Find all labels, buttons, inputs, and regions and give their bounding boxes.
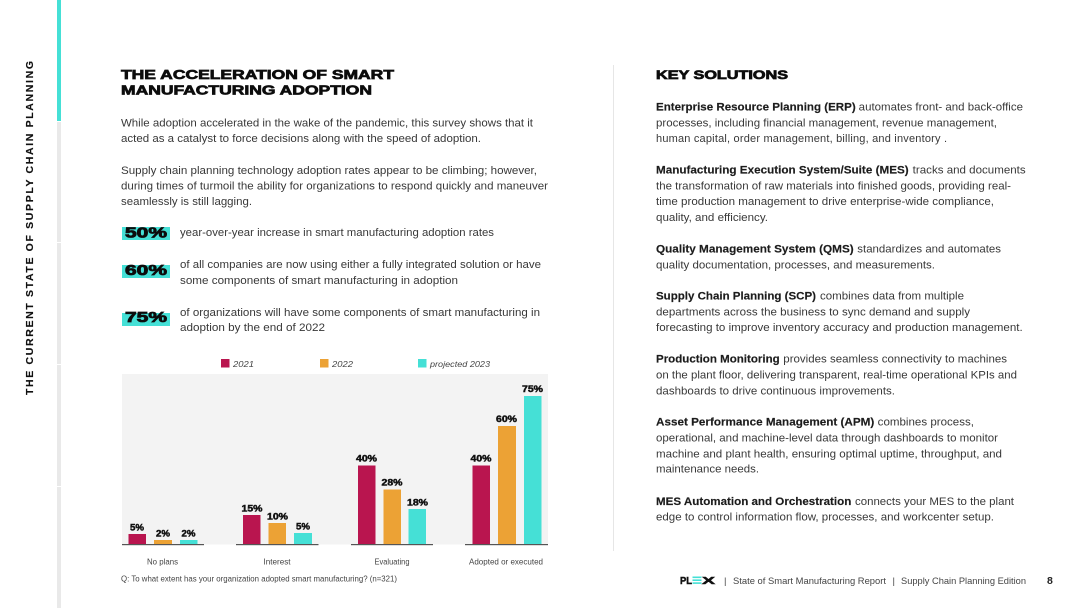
solution: APM: machine and plant health, ensuring optimal uptime, throughput, and — [656, 448, 1002, 460]
stat: 75%: adoption by the end of 2022 — [180, 322, 325, 334]
column divider — [613, 65, 614, 551]
intro text block — [121, 118, 548, 208]
chart legend: projected 2023 — [429, 359, 490, 369]
group: no plans — [128, 522, 198, 544]
intro text block: during times of turmoil the ability for organizations to respond quickly and maneuver — [121, 180, 548, 192]
solution: MES automation and orchestration: MES Automation and Orchestration — [656, 496, 852, 508]
solution: production monitoring: on the plant floor, delivering transparent, real-time operational KPIs and — [656, 369, 1017, 381]
stat: 50% — [122, 224, 495, 242]
solution: ERP — [656, 102, 1023, 145]
stat: 50%: year-over-year increase in smart manufacturing adoption rates — [180, 227, 495, 239]
group: evaluating: 40% — [356, 454, 377, 464]
intro text block: acted as a catalyst to force decisions along with the speed of adoption. — [121, 133, 481, 145]
solution: QMS: Quality Management System (QMS) — [656, 243, 854, 255]
bar chart — [122, 374, 548, 566]
intro text block: While adoption accelerated in the wake of the pandemic, this survey shows that it — [121, 118, 533, 130]
axis category labels: Interest — [264, 558, 291, 566]
group: no plans: 5% — [130, 522, 144, 532]
solution: SCP: forecasting to improve inventory accuracy and production management. — [656, 322, 1023, 334]
stat: 60%: some components of smart manufacturing in adoption — [180, 275, 458, 287]
chart legend — [221, 359, 490, 369]
solution: QMS — [656, 243, 1002, 271]
vertical section label: THE CURRENT STATE OF SUPPLY CHAIN PLANNING — [24, 61, 36, 395]
solution: ERP: automates front- and back-office — [859, 102, 1023, 114]
group: interest — [242, 504, 312, 544]
solution: SCP: combines data from multiple — [820, 291, 964, 303]
footer — [680, 575, 1053, 587]
group: adopted or executed: 75% — [522, 384, 543, 394]
group: adopted or executed: 60% — [496, 414, 517, 424]
solution: ERP: Enterprise Resource Planning (ERP) — [656, 102, 856, 114]
solution: production monitoring: dashboards to drive continuous improvements. — [656, 385, 895, 397]
heading: acceleration of smart manufacturing adoption: MANUFACTURING ADOPTION — [121, 82, 372, 97]
solution: MES automation and orchestration — [656, 496, 1014, 523]
group: interest: 5% — [296, 522, 310, 532]
solution: QMS: quality documentation, processes, and measurements. — [656, 259, 935, 271]
stat: 75% — [122, 307, 540, 334]
solution: MES: the transformation of raw materials into finished goods, providing real- — [656, 180, 1011, 192]
group: interest: 15% — [242, 504, 262, 514]
side progress rail — [57, 0, 61, 608]
solution: MES: tracks and documents — [913, 165, 1026, 177]
solution: MES automation and orchestration: edge to control information flow, processes, and workcenter setup. — [656, 511, 994, 523]
survey question note: Q: To what extent has your organization adopted smart manufacturing? (n=321) — [121, 574, 397, 584]
group: no plans: 2% — [182, 528, 196, 538]
footer: State of Smart Manufacturing Report — [733, 576, 886, 587]
solution: APM: Asset Performance Management (APM) — [656, 417, 875, 429]
stat: 60% — [122, 259, 541, 287]
group: evaluating: 28% — [382, 478, 402, 488]
chart legend: 2022 — [331, 359, 353, 369]
footer: 8 — [1047, 575, 1053, 587]
group: adopted or executed: 40% — [470, 454, 492, 464]
stat: 60%: 60% — [125, 262, 167, 279]
solution: MES — [656, 165, 1026, 224]
solution: production monitoring — [656, 354, 1017, 397]
solution: APM: operational, and machine-level data through dashboards to monitor — [656, 433, 998, 445]
chart legend: 2021 — [232, 359, 254, 369]
stat: 75%: of organizations will have some components of smart manufacturing in — [180, 307, 540, 319]
solution: MES: quality, and efficiency. — [656, 212, 768, 224]
group: interest: 10% — [267, 512, 288, 522]
intro text block: seamlessly is still lagging. — [121, 196, 252, 208]
solution: APM: maintenance needs. — [656, 464, 759, 476]
group: evaluating — [356, 454, 428, 544]
solution: ERP: human capital, order management, billing, and inventory . — [656, 133, 947, 145]
solution: SCP: departments across the business to sync demand and supply — [656, 307, 971, 319]
group: adopted or executed — [470, 384, 543, 544]
group: no plans: 2% — [156, 528, 170, 538]
solution: QMS: standardizes and automates — [857, 243, 1002, 255]
axis category labels — [147, 558, 543, 566]
logo: PLEX: PL — [680, 575, 693, 587]
stat: 75%: 75% — [125, 309, 167, 326]
solution: SCP — [656, 291, 1023, 334]
solution: ERP: processes, including financial management, revenue management, — [656, 118, 997, 130]
heading: acceleration of smart manufacturing adoption: THE ACCELERATION OF SMART — [121, 67, 394, 82]
axis category labels: Adopted or executed — [469, 558, 543, 566]
heading: acceleration of smart manufacturing adoption — [121, 67, 394, 97]
solution: APM: combines process, — [878, 417, 974, 429]
group: evaluating: 18% — [407, 498, 428, 508]
logo: PLEX: X — [702, 575, 715, 587]
solution: MES automation and orchestration: connects your MES to the plant — [855, 496, 1014, 508]
footer: Supply Chain Planning Edition — [901, 576, 1026, 587]
heading: key solutions: KEY SOLUTIONS — [656, 70, 788, 82]
intro text block: Supply chain planning technology adoption rates appear to be climbing; however, — [121, 165, 537, 177]
axis category labels: No plans — [147, 558, 178, 566]
solution: SCP: Supply Chain Planning (SCP) — [656, 291, 816, 303]
solution: MES: Manufacturing Execution System/Suite (MES) — [656, 165, 909, 177]
solution: production monitoring: Production Monitoring — [656, 354, 780, 366]
solution: production monitoring: provides seamless connectivity to machines — [783, 354, 1008, 366]
axis category labels: Evaluating — [374, 558, 410, 566]
solution: APM — [656, 417, 1002, 476]
stat: 50%: 50% — [125, 224, 167, 242]
footer: | — [892, 576, 895, 587]
stat: 60%: of all companies are now using either a fully integrated solution or have — [180, 259, 541, 271]
solution: MES: time production management to drive enterprise-wide compliance, — [656, 196, 994, 208]
logo: PLEX — [680, 575, 715, 587]
footer: | — [724, 576, 726, 587]
